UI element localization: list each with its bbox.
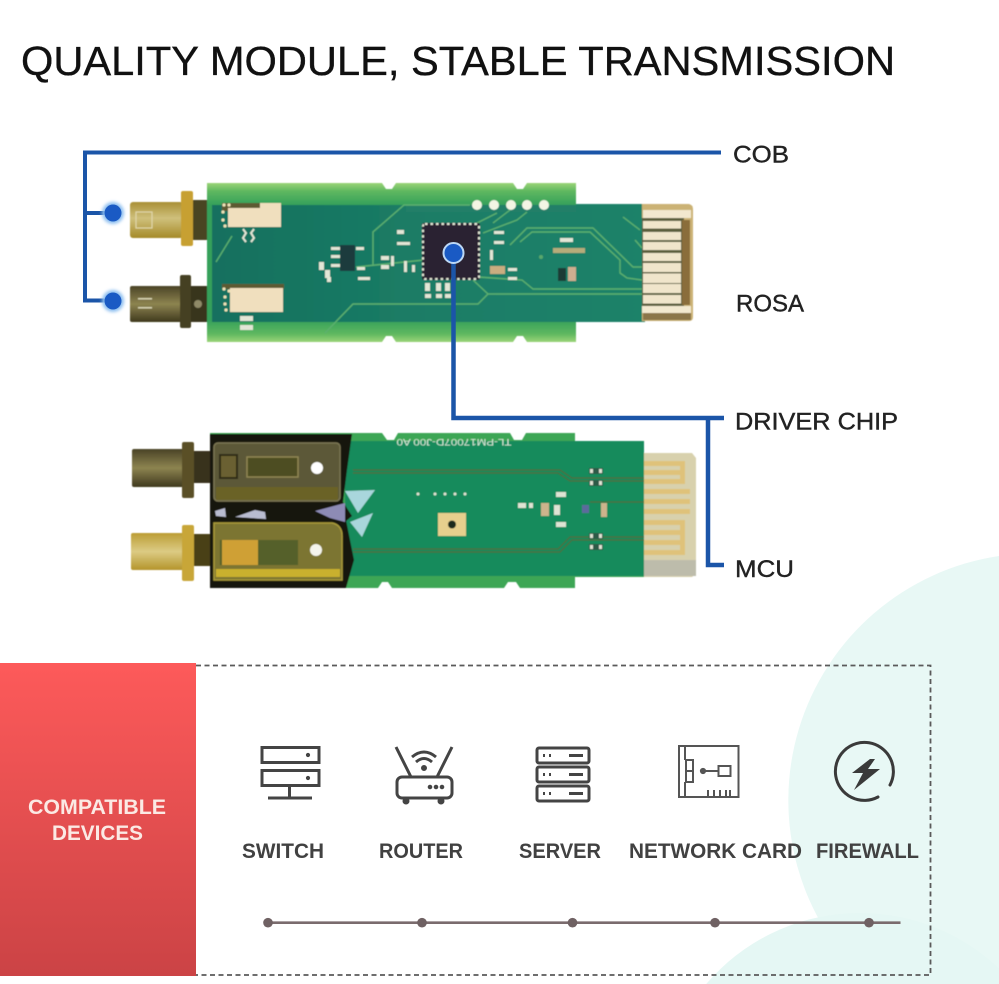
gold edge connector bbox=[642, 204, 693, 321]
device labels: FIREWALL bbox=[816, 840, 919, 863]
gold test pad bbox=[438, 513, 466, 536]
shrink wrap: amber fibre housing bbox=[210, 503, 354, 588]
device labels: SWITCH bbox=[242, 840, 324, 863]
module board: top side bbox=[130, 183, 693, 342]
ESD warning triangles bbox=[345, 490, 375, 537]
panel: red heading block bbox=[0, 663, 196, 976]
copper traces bbox=[216, 205, 642, 333]
label: COB: COB bbox=[733, 142, 789, 168]
icon: router bbox=[396, 747, 452, 804]
device labels: ROUTER bbox=[379, 840, 463, 863]
device labels: SERVER bbox=[519, 840, 601, 863]
icon: server bbox=[537, 748, 589, 801]
label: DRIVER CHIP: DRIVER CHIP bbox=[735, 408, 898, 436]
solder mask panel bbox=[345, 441, 644, 576]
device labels: NETWORK CARD bbox=[629, 840, 802, 863]
connector: upper dark bbox=[132, 442, 212, 498]
label: ROSA: ROSA bbox=[736, 290, 804, 318]
connector: lower yellow bbox=[131, 525, 212, 581]
board traces bbox=[353, 470, 644, 552]
timeline with device markers bbox=[263, 918, 900, 928]
white vias bbox=[472, 200, 549, 210]
connector: upper brass bbox=[130, 191, 207, 246]
background: pale teal circles bbox=[706, 556, 999, 984]
heading: compatible devices: COMPATIBLE bbox=[28, 796, 166, 819]
icon: firewall bbox=[835, 742, 893, 800]
heading: compatible devices bbox=[28, 796, 166, 845]
device labels bbox=[242, 840, 919, 863]
small components bbox=[416, 468, 607, 550]
gold pads bbox=[221, 203, 284, 312]
IC chips bbox=[340, 223, 480, 280]
circuit board outline bbox=[207, 183, 576, 342]
circuit board outline bbox=[210, 433, 644, 588]
connector: lower dark bbox=[130, 275, 207, 328]
panel: compatible devices frame bbox=[196, 666, 930, 975]
icon: network card bbox=[679, 746, 738, 797]
title: QUALITY MODULE, STABLE TRANSMISSION bbox=[21, 38, 895, 84]
shrink wrap: dark fibre housing bbox=[210, 434, 352, 522]
label: MCU: MCU bbox=[735, 556, 794, 583]
gold edge connector bbox=[644, 453, 696, 577]
icon: switch bbox=[262, 748, 319, 798]
heading: compatible devices: DEVICES bbox=[52, 822, 143, 845]
connector tongue and solder mask panel bbox=[212, 204, 645, 322]
silkscreen part number: TL-PM17007D-J00 A0 bbox=[396, 436, 512, 447]
callout lines: COB and ROSA bbox=[85, 152, 721, 300]
callout line: chip to driver chip and MCU bbox=[454, 262, 724, 565]
small components bbox=[240, 229, 585, 330]
callout marker: chip dot bbox=[444, 243, 464, 263]
callout markers: connector dots bbox=[102, 202, 124, 312]
module board: bottom side bbox=[131, 433, 696, 588]
